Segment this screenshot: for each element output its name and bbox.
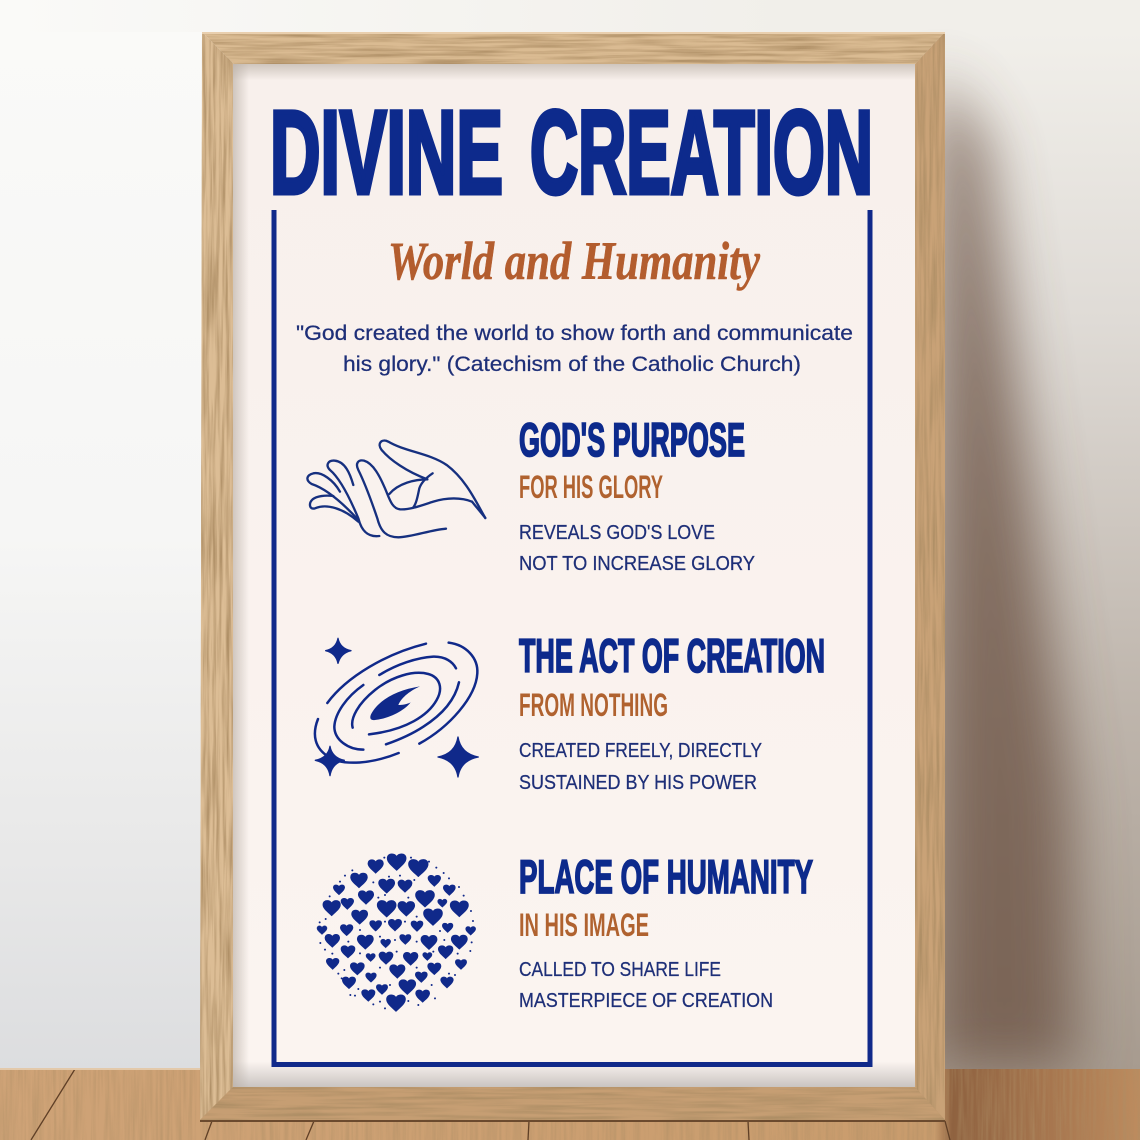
wooden floor xyxy=(0,1068,1140,1140)
heading block: the act of creation: FROM NOTHING xyxy=(519,687,668,723)
title xyxy=(270,87,873,219)
heading block: the act of creation xyxy=(519,629,825,794)
title: DIVINE xyxy=(270,87,503,219)
heading block: place of humanity: CALLED TO SHARE LIFE xyxy=(519,959,721,981)
heading block: God's purpose: GOD'S PURPOSE xyxy=(519,413,745,466)
heading block: place of humanity: PLACE OF HUMANITY xyxy=(519,850,813,903)
heading block: God's purpose: FOR HIS GLORY xyxy=(519,469,663,505)
heading block: God's purpose xyxy=(519,413,755,575)
wooden picture frame xyxy=(200,32,945,1120)
quote xyxy=(296,322,853,376)
heading block: place of humanity: MASTERPIECE OF CREATION xyxy=(519,990,773,1012)
quote: his glory." (Catechism of the Catholic Church) xyxy=(343,353,801,376)
heading block: God's purpose: REVEALS GOD'S LOVE xyxy=(519,522,715,544)
heading block: the act of creation: CREATED FREELY, DIRECTLY xyxy=(519,740,762,762)
blue content border xyxy=(274,210,870,1064)
title: CREATION xyxy=(530,87,873,219)
icon: sphere of hearts xyxy=(317,854,476,1011)
heading block: place of humanity xyxy=(519,850,813,1012)
poster paper xyxy=(233,64,915,1087)
subtitle: World and Humanity xyxy=(388,231,761,291)
heading block: God's purpose: NOT TO INCREASE GLORY xyxy=(519,553,755,575)
heading block: the act of creation: THE ACT OF CREATION xyxy=(519,629,825,682)
quote: "God created the world to show forth and communicate xyxy=(296,322,853,345)
heading block: place of humanity: IN HIS IMAGE xyxy=(519,907,649,943)
icon: galaxy with stars xyxy=(315,638,478,777)
icon: hand xyxy=(307,441,485,537)
heading block: the act of creation: SUSTAINED BY HIS POWER xyxy=(519,772,757,794)
